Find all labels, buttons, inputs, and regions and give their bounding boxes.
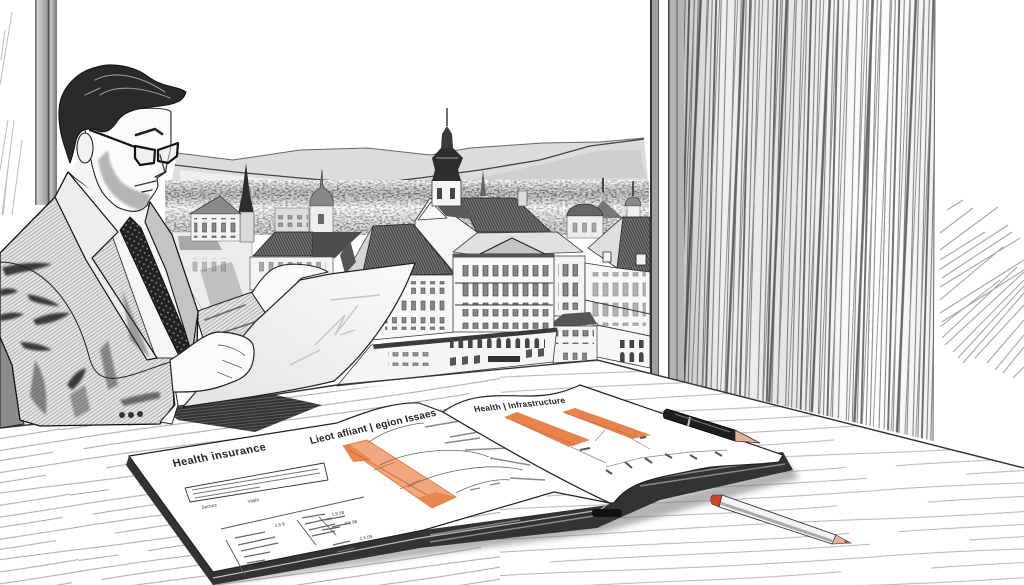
white pencil (711, 495, 851, 544)
right wall hatching (939, 200, 1024, 378)
left orange bar (343, 440, 456, 508)
far domes (480, 170, 641, 238)
table back edge (0, 360, 1024, 468)
near lapel (55, 172, 157, 360)
far hand (252, 264, 328, 320)
gabled house (190, 196, 241, 241)
right heading: Health | Infrastructure (473, 395, 567, 414)
left dark-roof building (340, 224, 455, 340)
chair (0, 337, 24, 428)
left page leader lines (369, 423, 523, 493)
buttons (119, 411, 143, 418)
table labels: 1.5 58 (331, 510, 345, 517)
palace roof and pediment (453, 232, 583, 256)
lower arcade block (337, 328, 557, 386)
tie (120, 217, 192, 358)
spire (238, 163, 254, 242)
small dome tower (310, 170, 333, 233)
left wall sketch strokes (0, 12, 22, 215)
curtain (684, 0, 935, 441)
summary box (185, 463, 328, 502)
person (0, 65, 328, 426)
table labels (201, 497, 379, 556)
right window frame (650, 0, 684, 381)
jacket fold shading (0, 263, 160, 418)
black pen (663, 409, 760, 443)
table labels: 1.20 (369, 549, 379, 556)
book shadow on table (213, 466, 800, 585)
table labels: Vitald (247, 497, 260, 504)
neck and head (59, 65, 186, 213)
church with tower (415, 108, 551, 270)
table labels: 1.5 9 (274, 521, 286, 528)
glasses (90, 130, 178, 165)
left faded buildings (172, 232, 252, 309)
view: city buildings (172, 108, 650, 386)
far lapel (145, 202, 198, 354)
table labels: 1.5 09 (359, 534, 373, 541)
stubble (98, 150, 150, 210)
curtain edge (933, 0, 935, 441)
right page (443, 385, 783, 503)
open booklet (126, 385, 793, 585)
left page (129, 403, 610, 575)
near cuff (160, 360, 178, 424)
eyebrow (136, 129, 162, 135)
table (0, 360, 1024, 585)
nose and mouth (135, 155, 165, 192)
table labels: Sectors (201, 502, 218, 510)
right building (553, 217, 650, 368)
left page subheading: Lieot afliant | egion Issaes (309, 408, 438, 447)
chart axes (571, 430, 727, 467)
jacket (0, 172, 198, 426)
held paper (183, 263, 415, 407)
low wing (553, 312, 597, 363)
table labels: 0.5 98 (344, 519, 358, 526)
view: distant hills (170, 138, 648, 190)
dark roof houses (250, 232, 362, 290)
far arm (195, 292, 271, 345)
hair (59, 65, 186, 163)
table rule lines (221, 497, 364, 575)
orange bars (504, 408, 651, 447)
page stack and cover (126, 452, 793, 585)
shirt (72, 176, 193, 358)
ear (77, 133, 93, 163)
mid town block (275, 208, 309, 232)
left window frame (35, 0, 57, 205)
near hand (170, 332, 254, 392)
shadow under paper (163, 392, 322, 432)
sleeve seam (0, 262, 170, 378)
left heading: Health insurance (171, 441, 268, 470)
palace facade with window rows (453, 254, 554, 332)
view: distant city band (165, 180, 649, 235)
